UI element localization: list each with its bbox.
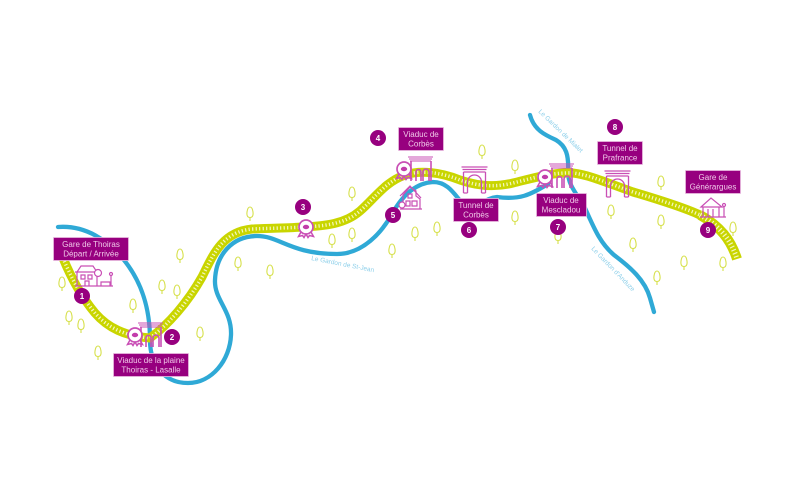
trees bbox=[59, 145, 736, 360]
number markers: 2 bbox=[170, 333, 175, 342]
river labels: Le Gardon de St-Jean bbox=[311, 255, 375, 274]
number markers: 4 bbox=[376, 134, 381, 143]
icon: medal 7 bbox=[538, 170, 552, 188]
label: Gare de Thoiras: Départ / Arrivée bbox=[63, 250, 119, 258]
icon: medal 4 bbox=[396, 162, 412, 180]
label: Tunnel de Corbès bbox=[454, 198, 498, 222]
number markers: 5 bbox=[391, 211, 396, 220]
icon: station Thoiras bbox=[75, 266, 113, 286]
river labels bbox=[311, 108, 636, 293]
number markers: 7 bbox=[556, 223, 561, 232]
railway line bbox=[63, 172, 737, 338]
icon: station Générargues bbox=[700, 198, 726, 217]
label: Gare de Générargues: Gare de bbox=[699, 173, 728, 182]
label: Gare de Thoiras bbox=[54, 238, 128, 260]
icon: viaduct plaine bbox=[138, 323, 163, 347]
label: Tunnel de Prafrance bbox=[598, 142, 642, 164]
number markers: 1 bbox=[80, 292, 85, 301]
label: Gare de Thoiras: Gare de Thoiras bbox=[62, 240, 120, 249]
label: Gare de Générargues: Générargues bbox=[690, 182, 736, 192]
icon: house bbox=[399, 186, 422, 209]
icon: medal 3 bbox=[298, 220, 314, 238]
number markers bbox=[74, 119, 716, 345]
label: Viaduc de la plaine bbox=[114, 354, 188, 376]
label: Viaduc de Corbès: Corbès bbox=[408, 140, 434, 148]
label: Viaduc de la plaine: Thoiras - Lasalle bbox=[121, 366, 181, 374]
icon: viaduct Mescladou bbox=[549, 164, 574, 188]
label: Tunnel de Prafrance: Tunnel de bbox=[602, 144, 638, 153]
river labels: Le Gardon de Mialet bbox=[537, 108, 584, 154]
label: Gare de Générargues bbox=[686, 170, 740, 194]
label: Tunnel de Corbès: Corbès bbox=[463, 210, 489, 220]
icon: tunnel Corbès bbox=[462, 167, 488, 193]
number markers: 9 bbox=[706, 226, 711, 235]
label: Tunnel de Prafrance: Prafrance bbox=[603, 154, 638, 162]
label: Viaduc de Mescladou: Mescladou bbox=[542, 206, 580, 214]
number markers: 8 bbox=[613, 123, 618, 132]
river: Gardon de Mialet and Gardon d'Anduze bbox=[530, 115, 654, 312]
river labels: Le Gardon d'Anduze bbox=[590, 246, 636, 293]
river: Gardon de St-Jean bbox=[58, 182, 548, 383]
label: Viaduc de Mescladou: Viaduc de bbox=[543, 196, 579, 205]
label: Tunnel de Corbès: Tunnel de bbox=[458, 201, 494, 210]
label: Viaduc de la plaine: Viaduc de la plaine bbox=[117, 356, 185, 365]
icon: medal 2 bbox=[128, 328, 142, 346]
label: Viaduc de Corbès bbox=[398, 128, 444, 150]
icon: tunnel Prafrance bbox=[604, 171, 630, 197]
number markers: 6 bbox=[467, 226, 472, 235]
label: Viaduc de Mescladou bbox=[536, 194, 586, 216]
icon: viaduct Corbès bbox=[408, 157, 433, 181]
label: Viaduc de Corbès: Viaduc de bbox=[403, 130, 439, 139]
number markers: 3 bbox=[301, 203, 306, 212]
